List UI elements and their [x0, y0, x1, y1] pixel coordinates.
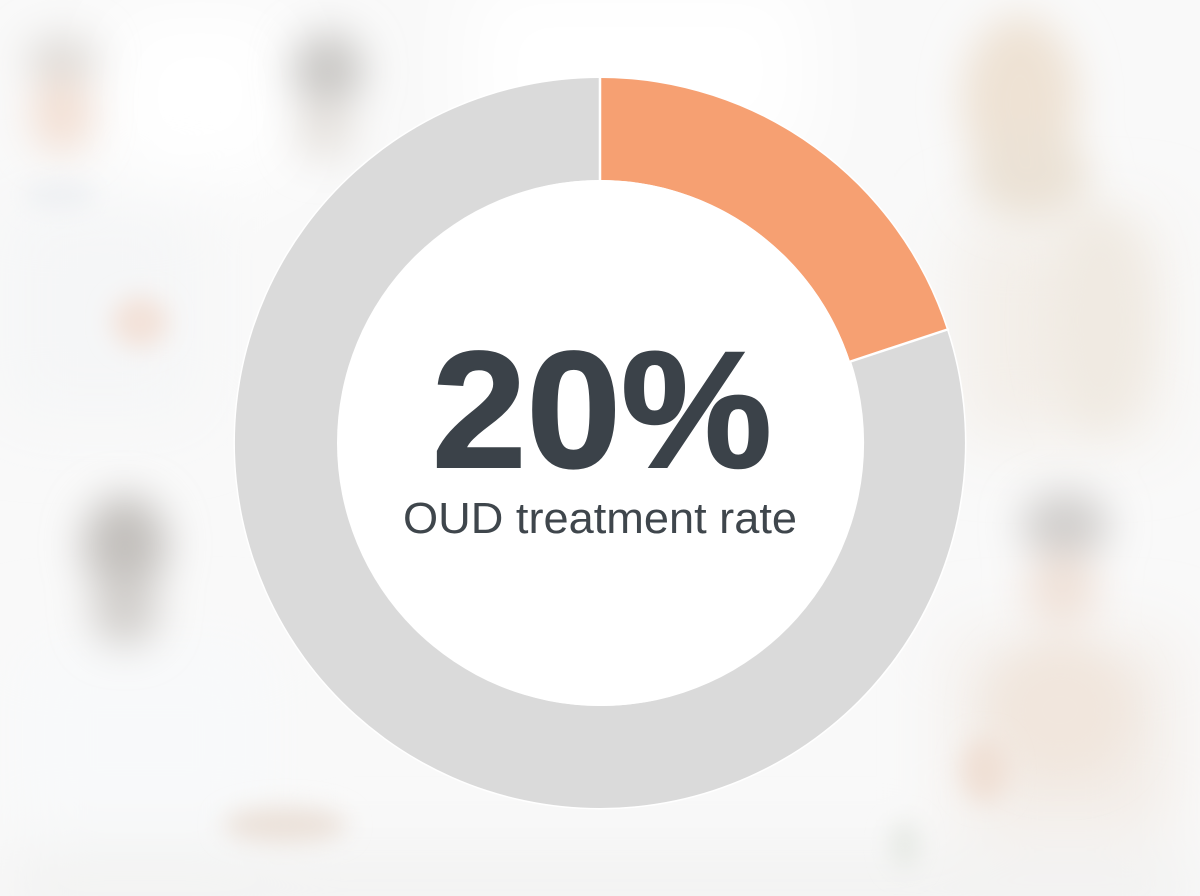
big percentage figure: 20% [432, 318, 772, 503]
chart outer white edge [234, 76, 966, 810]
remaining share segment (grey) [235, 78, 965, 808]
treated share segment (orange) [600, 78, 947, 362]
chart center hole [337, 180, 863, 706]
segment divider lines [600, 76, 949, 362]
chart label: OUD treatment rate [403, 494, 797, 543]
